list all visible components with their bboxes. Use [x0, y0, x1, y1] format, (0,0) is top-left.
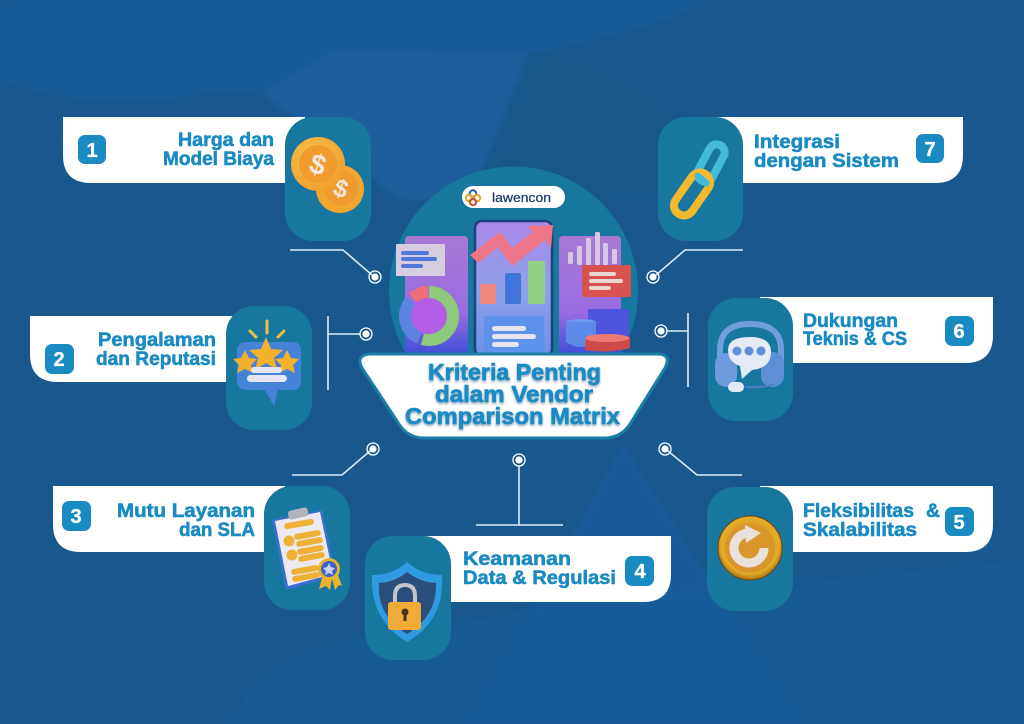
panel: 4 Keamanan Data & Regulasi: Data & Regulasi	[463, 568, 616, 589]
icon: shield with padlock	[372, 562, 442, 642]
icon: coins: $	[306, 147, 330, 182]
panel: 2 Pengalaman dan Reputasi: 2	[53, 349, 65, 371]
phone	[470, 221, 553, 356]
panel: 6 Dukungan Teknis & CS	[708, 297, 993, 421]
panel: 5 Fleksibilitas & Skalabilitas: Fleksibilitas	[803, 501, 914, 522]
icon: clipboard	[272, 507, 342, 590]
panel: 7 Integrasi dengan Sistem	[658, 117, 963, 241]
panel: 7 Integrasi dengan Sistem: 7	[924, 139, 936, 161]
right dashboard panel	[559, 232, 631, 354]
panel: 3 Mutu Layanan dan SLA: 3	[70, 506, 82, 528]
central illustration	[389, 166, 638, 416]
panel: 1 Harga dan Model Biaya: 1	[86, 140, 98, 162]
panel: 3 Mutu Layanan dan SLA	[53, 486, 350, 610]
title panel	[360, 354, 667, 438]
panel: 5 Fleksibilitas & Skalabilitas: Skalabilitas	[803, 520, 917, 541]
title text	[405, 359, 620, 429]
panel: 4 Keamanan Data & Regulasi: 4	[634, 561, 646, 583]
connector lines	[290, 250, 743, 525]
panel: 3 Mutu Layanan dan SLA: Mutu Layanan	[117, 501, 255, 522]
panel: 6 Dukungan Teknis & CS: Teknis & CS	[803, 329, 907, 350]
icon: lawencon mark	[466, 190, 480, 205]
left dashboard panel	[395, 236, 468, 354]
icon: rising arrow	[470, 225, 553, 266]
panel: 2 Pengalaman dan Reputasi: Pengalaman	[98, 330, 216, 351]
panel: 1 Harga dan Model Biaya	[63, 117, 371, 241]
title text: dalam Vendor	[435, 381, 593, 407]
icon: coins: $	[330, 173, 352, 204]
panel: 4 Keamanan Data & Regulasi	[365, 536, 671, 660]
panel: 5 Fleksibilitas & Skalabilitas: 5	[953, 512, 965, 534]
panel: 7 Integrasi dengan Sistem: dengan Sistem	[754, 151, 899, 172]
panel: 4 Keamanan Data & Regulasi: Keamanan	[463, 549, 571, 570]
logo pill: lawencon	[492, 191, 551, 205]
icon: star rating bubble	[233, 321, 301, 406]
panel: 1 Harga dan Model Biaya: Harga dan	[178, 130, 274, 151]
panel: 2 Pengalaman dan Reputasi	[30, 306, 312, 430]
donut chart	[395, 282, 463, 350]
icon: chain links	[670, 142, 727, 219]
logo pill	[462, 186, 565, 208]
panel: 2 Pengalaman dan Reputasi: dan Reputasi	[96, 349, 216, 370]
panel: 5 Fleksibilitas & Skalabilitas: &	[926, 501, 940, 522]
panel: 6 Dukungan Teknis & CS: 6	[953, 321, 965, 343]
panel: 6 Dukungan Teknis & CS: Dukungan	[803, 311, 898, 332]
panel: 7 Integrasi dengan Sistem: Integrasi	[754, 132, 840, 153]
panel: 5 Fleksibilitas & Skalabilitas	[707, 486, 993, 611]
icon: coins	[291, 137, 364, 213]
title text: Kriteria Penting	[428, 359, 601, 385]
panel: 3 Mutu Layanan dan SLA: dan SLA	[179, 520, 255, 541]
panel: 1 Harga dan Model Biaya: Model Biaya	[163, 149, 274, 170]
icon: gold refresh coin	[718, 516, 782, 580]
title text: Comparison Matrix	[405, 403, 620, 429]
icon: headset with chat bubble	[715, 324, 784, 392]
